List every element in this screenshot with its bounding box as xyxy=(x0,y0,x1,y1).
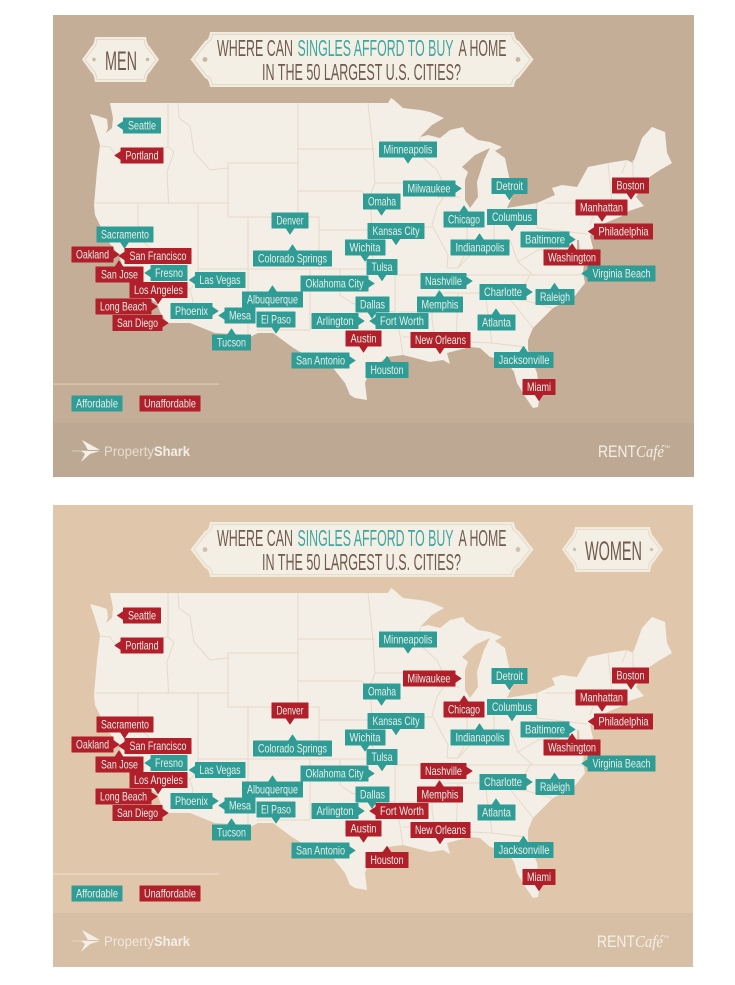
label: Fresno xyxy=(145,756,187,770)
label: Tulsa xyxy=(367,750,397,770)
label: Washington: Washington xyxy=(548,251,596,264)
label: Columbus: Columbus xyxy=(492,701,532,714)
label: El Paso: El Paso xyxy=(261,803,291,816)
label: Milwaukee: Milwaukee xyxy=(408,182,450,195)
label: Manhattan: Manhattan xyxy=(580,691,623,704)
label: Oklahoma City: Oklahoma City xyxy=(306,277,364,290)
label: Austin: Austin xyxy=(350,332,376,345)
label: Houston xyxy=(366,356,408,378)
label: Wichita xyxy=(346,240,385,261)
label: Arlington: Arlington xyxy=(316,315,354,328)
label: Colorado Springs: Colorado Springs xyxy=(258,742,327,755)
label: Tucson xyxy=(212,329,250,350)
label: San Francisco xyxy=(119,738,191,754)
label: Miami xyxy=(523,380,555,400)
label: Charlotte: Charlotte xyxy=(484,776,522,789)
label: Fort Worth xyxy=(370,314,428,328)
label: Charlotte: Charlotte xyxy=(484,286,522,299)
label: Atlanta xyxy=(478,799,515,820)
label: Kansas City: Kansas City xyxy=(372,225,420,238)
label: Philadelphia: Philadelphia xyxy=(598,225,649,238)
label: Baltimore: Baltimore xyxy=(525,723,565,736)
label: Austin: Austin xyxy=(350,822,376,835)
label: Nashville: Nashville xyxy=(425,765,462,778)
label: New Orleans xyxy=(411,332,470,354)
logo: PropertyShark: Shark xyxy=(154,933,190,949)
logo: PropertyShark: Property xyxy=(104,933,154,949)
label: Colorado Springs: Colorado Springs xyxy=(258,252,327,265)
label: Tucson: Tucson xyxy=(217,826,246,839)
label: Indianapolis: Indianapolis xyxy=(456,731,505,744)
label: Las Vegas: Las Vegas xyxy=(200,764,241,777)
label: Virginia Beach xyxy=(582,266,655,281)
label: New Orleans: New Orleans xyxy=(415,824,466,837)
label: Boston xyxy=(612,668,648,689)
label: Philadelphia xyxy=(588,714,652,729)
label: Detroit: Detroit xyxy=(496,670,524,683)
label: Miami xyxy=(523,870,555,890)
label: Indianapolis xyxy=(451,724,509,745)
label: Albuquerque: Albuquerque xyxy=(247,293,298,306)
logo: RENTCafe: RENT xyxy=(597,932,635,951)
label: Dallas: Dallas xyxy=(360,788,385,801)
label: San Jose xyxy=(96,751,143,772)
title banner: women xyxy=(190,522,534,577)
label: Memphis: Memphis xyxy=(422,298,459,311)
title banner: women: SINGLES AFFORD TO BUY xyxy=(298,525,454,551)
label: Detroit xyxy=(492,668,527,690)
label: Chicago: Chicago xyxy=(448,213,480,226)
label: Dallas xyxy=(356,787,389,808)
label: Wichita: Wichita xyxy=(350,731,381,744)
label: Las Vegas xyxy=(190,762,245,778)
label: Baltimore: Baltimore xyxy=(525,233,565,246)
label: Denver: Denver xyxy=(276,704,304,717)
label: Miami: Miami xyxy=(527,381,551,394)
label: Albuquerque xyxy=(242,776,302,797)
label: Tucson xyxy=(212,819,250,840)
label: Indianapolis: Indianapolis xyxy=(456,241,505,254)
title banner: women: IN THE 50 LARGEST U.S. CITIES? xyxy=(262,549,461,575)
map of the United States: women xyxy=(90,588,672,898)
logo: RENTCafe xyxy=(598,442,670,461)
label: Denver xyxy=(272,703,308,724)
label: Wichita: Wichita xyxy=(350,241,381,254)
label: Virginia Beach: Virginia Beach xyxy=(592,757,650,770)
label: Jacksonville: Jacksonville xyxy=(498,354,550,367)
label: Boston xyxy=(612,178,648,199)
label: Omaha xyxy=(364,194,400,215)
label: Jacksonville xyxy=(494,346,553,368)
label: Oklahoma City: Oklahoma City xyxy=(306,767,364,780)
panel background: men xyxy=(53,15,694,477)
label: Virginia Beach xyxy=(582,756,655,771)
label: San Diego: San Diego xyxy=(117,807,158,820)
label: Fresno: Fresno xyxy=(155,757,183,770)
label: El Paso xyxy=(257,802,295,823)
label: Memphis: Memphis xyxy=(422,788,459,801)
label: Tulsa: Tulsa xyxy=(372,751,393,764)
logo: PropertyShark xyxy=(72,440,190,462)
label: Portland: Portland xyxy=(126,149,158,162)
label: Omaha: Omaha xyxy=(368,195,396,208)
label: Raleigh: Raleigh xyxy=(540,781,570,794)
label: Portland xyxy=(115,148,163,163)
label: New Orleans: New Orleans xyxy=(415,334,466,347)
badge: MEN xyxy=(82,37,159,82)
title banner: men: A HOME xyxy=(458,35,506,61)
label: Kansas City xyxy=(368,714,424,734)
label: Mesa xyxy=(219,798,255,813)
label: El Paso: El Paso xyxy=(261,313,291,326)
label: Sacramento: Sacramento xyxy=(101,718,149,731)
label: Milwaukee: Milwaukee xyxy=(408,672,450,685)
label: Fort Worth xyxy=(370,804,428,818)
label: Portland xyxy=(115,638,163,653)
title banner: men: IN THE 50 LARGEST U.S. CITIES? xyxy=(262,59,461,85)
label: Mesa: Mesa xyxy=(229,309,251,322)
label: Houston: Houston xyxy=(370,364,404,377)
badge: WOMEN xyxy=(562,527,663,572)
label: Arlington: Arlington xyxy=(316,805,354,818)
label: Boston: Boston xyxy=(616,179,644,192)
label: Colorado Springs xyxy=(254,245,332,266)
label: Houston: Houston xyxy=(370,854,404,867)
label: Minneapolis: Minneapolis xyxy=(384,633,433,646)
title banner: women: A HOME xyxy=(458,525,506,551)
label: Manhattan xyxy=(576,200,627,221)
label: Wichita xyxy=(346,730,385,751)
label: Omaha xyxy=(364,684,400,705)
label: Fresno: Fresno xyxy=(155,267,183,280)
label: Miami: Miami xyxy=(527,871,551,884)
panel background: women xyxy=(53,505,693,967)
label: Sacramento: Sacramento xyxy=(101,228,149,241)
label: Sacramento xyxy=(97,717,153,738)
map of the United States: men xyxy=(90,98,672,408)
label: Washington: Washington xyxy=(548,741,596,754)
label: Tulsa: Tulsa xyxy=(372,261,393,274)
label: Washington xyxy=(544,734,600,755)
logo: RENTCafe: TM xyxy=(664,444,670,449)
label: Oakland: Oakland xyxy=(76,738,109,751)
label: Kansas City xyxy=(368,224,424,244)
label: San Jose xyxy=(96,261,143,282)
label: Los Angeles: Los Angeles xyxy=(134,284,183,297)
title banner: women: WHERE CAN xyxy=(217,525,293,551)
label: Nashville: Nashville xyxy=(425,275,462,288)
label: Columbus xyxy=(488,700,536,720)
label: San Antonio: San Antonio xyxy=(296,844,345,857)
label: Atlanta: Atlanta xyxy=(482,806,511,819)
logo: RENTCafe: Café xyxy=(636,442,665,461)
label: Chicago xyxy=(444,206,484,227)
label: Minneapolis: Minneapolis xyxy=(384,143,433,156)
label: Memphis xyxy=(418,291,462,312)
label: Los Angeles xyxy=(130,282,187,304)
badge: WOMEN: WOMEN xyxy=(585,536,642,566)
legend: women: Affordable xyxy=(76,887,118,900)
label: Columbus xyxy=(488,210,536,230)
label: Minneapolis xyxy=(380,142,436,163)
label: Phoenix: Phoenix xyxy=(175,795,208,808)
label: New Orleans xyxy=(411,822,470,844)
label: Dallas: Dallas xyxy=(360,298,385,311)
label: San Francisco xyxy=(119,248,191,264)
label: San Antonio: San Antonio xyxy=(296,354,345,367)
label: San Jose: San Jose xyxy=(101,268,138,281)
label: Minneapolis xyxy=(380,632,436,653)
panel: women xyxy=(53,505,693,967)
label: Omaha: Omaha xyxy=(368,685,396,698)
label: San Francisco: San Francisco xyxy=(130,250,186,263)
label: Tulsa xyxy=(367,260,397,280)
legend: men xyxy=(53,384,219,411)
label: Las Vegas xyxy=(190,272,245,288)
label: Philadelphia: Philadelphia xyxy=(598,715,649,728)
label: Chicago: Chicago xyxy=(448,703,480,716)
label: Albuquerque xyxy=(242,286,302,307)
label: Kansas City: Kansas City xyxy=(372,715,420,728)
logo: PropertyShark: Shark xyxy=(154,443,190,459)
logo: PropertyShark xyxy=(72,930,190,952)
label: Columbus: Columbus xyxy=(492,211,532,224)
logo: PropertyShark: Property xyxy=(104,443,154,459)
label: Seattle: Seattle xyxy=(128,119,156,132)
label: Colorado Springs xyxy=(254,735,332,756)
label: Virginia Beach: Virginia Beach xyxy=(592,267,650,280)
label: Raleigh: Raleigh xyxy=(540,291,570,304)
label: Dallas xyxy=(356,297,389,318)
label: Mesa: Mesa xyxy=(229,799,251,812)
label: Fort Worth: Fort Worth xyxy=(380,805,424,818)
label: Albuquerque: Albuquerque xyxy=(247,783,298,796)
label: San Diego: San Diego xyxy=(117,317,158,330)
label: El Paso xyxy=(257,312,295,333)
label: Denver: Denver xyxy=(276,214,304,227)
label: Denver xyxy=(272,213,308,234)
label: Los Angeles xyxy=(130,772,187,794)
logo: RENTCafe xyxy=(597,932,669,951)
label: Austin xyxy=(346,331,381,352)
title banner: men: WHERE CAN xyxy=(217,35,293,61)
label: Chicago xyxy=(444,696,484,717)
label: Fort Worth: Fort Worth xyxy=(380,315,424,328)
label: Boston: Boston xyxy=(616,669,644,682)
label: Fresno xyxy=(145,266,187,280)
footer band: women xyxy=(53,913,693,967)
label: Los Angeles: Los Angeles xyxy=(134,774,183,787)
label: Manhattan xyxy=(576,690,627,711)
label: Detroit: Detroit xyxy=(496,180,524,193)
label: San Francisco: San Francisco xyxy=(130,740,186,753)
label: Long Beach: Long Beach xyxy=(100,790,147,803)
label: Washington xyxy=(544,244,600,265)
title banner: men: SINGLES AFFORD TO BUY xyxy=(298,35,454,61)
label: Atlanta xyxy=(478,309,515,330)
label: Sacramento xyxy=(97,227,153,248)
legend: men: Unaffordable xyxy=(144,397,196,410)
label: Raleigh xyxy=(536,774,574,794)
label: Las Vegas: Las Vegas xyxy=(200,274,241,287)
badge: MEN: MEN xyxy=(105,46,137,76)
footer band: men xyxy=(53,423,694,477)
label: Oakland: Oakland xyxy=(76,248,109,261)
label: Phoenix: Phoenix xyxy=(175,305,208,318)
legend: men: Affordable xyxy=(76,397,118,410)
logo: RENTCafe: TM xyxy=(663,934,669,939)
legend: women: Unaffordable xyxy=(144,887,196,900)
label: Austin xyxy=(346,821,381,842)
label: Seattle xyxy=(118,608,160,623)
panel: men xyxy=(53,15,694,477)
label: Seattle: Seattle xyxy=(128,609,156,622)
label: Mesa xyxy=(219,308,255,323)
label: Indianapolis xyxy=(451,234,509,255)
title banner: men xyxy=(190,32,534,87)
label: Houston xyxy=(366,846,408,868)
label: Jacksonville xyxy=(494,836,553,858)
label: Raleigh xyxy=(536,284,574,304)
label: Manhattan: Manhattan xyxy=(580,201,623,214)
label: Jacksonville: Jacksonville xyxy=(498,844,550,857)
label: Portland: Portland xyxy=(126,639,158,652)
legend: women xyxy=(53,874,219,901)
label: San Jose: San Jose xyxy=(101,758,138,771)
label: Seattle xyxy=(118,118,160,133)
logo: RENTCafe: RENT xyxy=(598,442,636,461)
label: Atlanta: Atlanta xyxy=(482,316,511,329)
label: Detroit xyxy=(492,178,527,200)
label: Memphis xyxy=(418,781,462,802)
label: Tucson: Tucson xyxy=(217,336,246,349)
label: Philadelphia xyxy=(588,224,652,239)
logo: RENTCafe: Café xyxy=(635,932,664,951)
label: Long Beach: Long Beach xyxy=(100,300,147,313)
